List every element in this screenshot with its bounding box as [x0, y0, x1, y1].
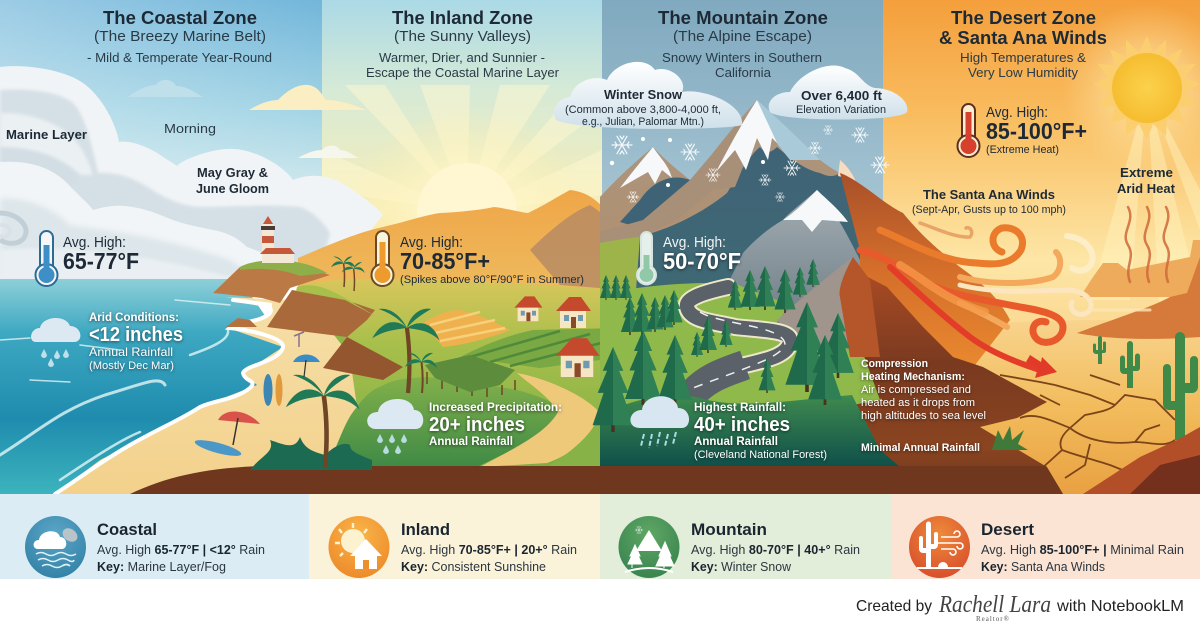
winding road [687, 287, 790, 397]
icon: mountain thermometer [637, 232, 656, 284]
background sky: inland zone with sun rays [322, 0, 602, 318]
small cloud [128, 80, 203, 97]
text: compression heating mechanism: high altitudes to sea level [861, 410, 986, 422]
heading: inland: (The Sunny Valleys) [394, 28, 531, 45]
summary panel: mountain [600, 494, 891, 579]
mountain green slope [600, 237, 640, 300]
icon: cactus and wind [909, 516, 970, 578]
desert shrub [992, 426, 1028, 450]
stat: inland temperature: 70-85°F+ [400, 248, 490, 274]
stat: mountain rainfall: 40+ inches [694, 414, 790, 436]
stat: coastal rainfall [89, 310, 183, 372]
desert rust ridge [1077, 257, 1200, 339]
heading: mountain: The Mountain Zone [658, 8, 828, 28]
footer credit: Realtor® [976, 615, 1010, 623]
desert mesa [1080, 240, 1200, 297]
red wind arrow [1026, 355, 1057, 378]
summary panel: desert: Avg. High 85-100°F+ | Minimal Rain [981, 542, 1184, 557]
stat: mountain rainfall: (Cleveland National Forest) [694, 449, 827, 461]
stat: coastal rainfall: Arid Conditions: [89, 310, 179, 324]
summary panel: coastal: Coastal [97, 520, 157, 539]
footer credit [856, 592, 1184, 623]
cloud: Winter Snow callout: Winter Snow [604, 87, 683, 102]
orange mountain slope [840, 173, 1010, 365]
forest foothill [600, 395, 900, 467]
label: The Santa Ana Winds [912, 187, 1066, 216]
label: The Santa Ana Winds: (Sept-Apr, Gusts up to 100 mph) [912, 204, 1066, 216]
cloud: elevation callout [769, 65, 907, 120]
footer credit: Rachell Lara [938, 592, 1051, 618]
summary panel: mountain: Avg. High 80-70°F | 40+° Rain [691, 542, 860, 557]
desert rock shade [1130, 455, 1200, 494]
stat: mountain rainfall [694, 400, 827, 461]
heading: coastal: (The Breezy Marine Belt) [94, 28, 266, 45]
cloud: Winter Snow callout: (Common above 3,800-4,000 ft, [565, 104, 721, 116]
label: Extreme Arid Heat: Extreme [1120, 165, 1173, 180]
stat: inland temperature [400, 234, 584, 286]
stat: coastal temperature [63, 234, 139, 274]
stat: desert temperature [986, 104, 1087, 156]
label: Extreme Arid Heat [1117, 165, 1176, 196]
heading: coastal: - Mild & Temperate Year-Round [87, 50, 272, 65]
label: May Gray and June Gloom: May Gray & [197, 165, 268, 180]
waves [0, 300, 230, 480]
summary panel: inland [309, 494, 600, 579]
houses [514, 296, 600, 377]
cloud: Winter Snow callout [554, 62, 742, 129]
small white cloud [298, 145, 358, 158]
stat: mountain temperature: 50-70°F [663, 248, 741, 274]
label: Extreme Arid Heat: Arid Heat [1117, 181, 1176, 196]
icon: coastal rain cloud [31, 318, 80, 367]
heading: inland: The Inland Zone [392, 8, 533, 28]
heading: mountain: (The Alpine Escape) [673, 28, 812, 45]
headland cliffs [213, 260, 403, 380]
heading: desert: The Desert Zone [951, 8, 1096, 28]
heat waves [1126, 207, 1169, 282]
heading: mountain: California [715, 65, 772, 80]
valley fields [297, 279, 660, 467]
beach [55, 297, 367, 494]
summary panel: desert [891, 494, 1200, 579]
stat: coastal temperature: 65-77°F [63, 248, 139, 274]
inland back hills [298, 190, 640, 320]
stat: inland temperature: Avg. High: [400, 234, 463, 251]
desert foreground rocks [1083, 427, 1200, 494]
inner brown ridge [840, 257, 1063, 494]
desert ground [890, 319, 1200, 494]
summary panel: coastal [0, 494, 309, 579]
icon: coastal thermometer [36, 231, 58, 286]
marine layer clouds [0, 66, 383, 280]
heading: desert: Very Low Humidity [968, 65, 1079, 80]
stat: desert temperature: (Extreme Heat) [986, 144, 1059, 156]
heading: coastal: The Coastal Zone [103, 8, 257, 28]
stat: coastal temperature: Avg. High: [63, 234, 126, 251]
mountain range [600, 100, 930, 400]
summary panel: desert: Key: Santa Ana Winds [981, 559, 1105, 574]
summary panel: inland: Avg. High 70-85°F+ | 20+° Rain [401, 542, 577, 557]
icon: mountain rain cloud [630, 396, 689, 448]
small cream cloud [249, 85, 367, 110]
conifer trees [593, 259, 854, 432]
grey rock foot [777, 257, 853, 350]
footer credit: with NotebookLM [1056, 598, 1184, 615]
summary panel: inland: Key: Consistent Sunshine [401, 559, 546, 574]
stat: desert temperature: Avg. High: [986, 104, 1048, 121]
stat: desert temperature: 85-100°F+ [986, 118, 1087, 144]
background sky: coastal zone [0, 0, 322, 280]
shoreline foam [55, 300, 283, 494]
heading: coastal [87, 8, 272, 65]
cloud: elevation callout: Elevation Variation [796, 104, 886, 116]
background sky: desert zone [883, 0, 1200, 420]
cloud: Winter Snow callout: e.g., Julian, Palomar Mtn.) [582, 116, 704, 128]
footer credit: Created by [856, 598, 932, 615]
label: Minimal Annual Rainfall: Minimal Annual Rainfall [861, 442, 980, 454]
stat: inland temperature: (Spikes above 80°F/90°F in Summer) [400, 274, 584, 286]
heading: desert [939, 8, 1107, 80]
text: compression heating mechanism: heated as it drops from [861, 397, 975, 409]
soil base band [130, 466, 1063, 494]
label: May Gray and June Gloom: June Gloom [196, 181, 269, 196]
summary panel: coastal: Key: Marine Layer/Fog [97, 559, 226, 574]
text: compression heating mechanism: Compression [861, 358, 928, 370]
small palms on the hill [331, 256, 365, 291]
text: compression heating mechanism: Air is compressed and [861, 384, 971, 396]
background sky: mountain zone [602, 0, 883, 300]
wind swirls: The Santa Ana Winds [860, 223, 1150, 370]
valley green behind road [600, 283, 880, 410]
stat: coastal rainfall: <12 inches [89, 324, 183, 346]
stat: coastal rainfall: (Mostly Dec Mar) [89, 360, 174, 372]
cracked earth [1000, 375, 1175, 478]
stat: inland rainfall: Annual Rainfall [429, 434, 513, 448]
icon: inland rain cloud [367, 399, 423, 454]
icon: cloud over waves [25, 516, 86, 578]
palm tree inland [372, 309, 440, 393]
heading: mountain [658, 8, 828, 80]
summary panel: coastal: Avg. High 65-77°F | <12° Rain [97, 542, 265, 557]
orange peak beside grey rock [840, 257, 880, 357]
shoreline rock [226, 318, 257, 327]
icon: trees and peaks [618, 516, 680, 578]
stat: mountain rainfall: Annual Rainfall [694, 434, 778, 448]
stat: mountain temperature [663, 234, 741, 274]
icon: inland thermometer [372, 231, 394, 286]
summary panel: mountain: Key: Winter Snow [691, 559, 792, 574]
summary panel: desert: Desert [981, 520, 1034, 539]
sea [0, 279, 285, 494]
stat: inland rainfall: Increased Precipitation: [429, 400, 562, 414]
heading: desert: & Santa Ana Winds [939, 28, 1107, 48]
icon: sun over house [328, 516, 390, 578]
snowflakes [610, 126, 889, 202]
cacti [1093, 332, 1198, 440]
label: The Santa Ana Winds: The Santa Ana Winds [923, 187, 1055, 202]
sun: desert [1062, 3, 1200, 320]
label: Morning: Morning [164, 121, 216, 136]
label: Marine Layer: Marine Layer [6, 127, 87, 142]
beach umbrellas and boards [194, 332, 320, 459]
cloud: elevation callout: Over 6,400 ft [801, 88, 883, 103]
summary panel: mountain: Mountain [691, 520, 767, 539]
heading: inland: Warmer, Drier, and Sunnier - [379, 50, 545, 65]
stat: mountain temperature: Avg. High: [663, 234, 726, 251]
text: compression heating mechanism: Heating Mechanism: [861, 371, 965, 383]
coastal shrubs [250, 437, 372, 470]
heading: inland: Escape the Coastal Marine Layer [366, 65, 560, 80]
icon: desert thermometer [958, 104, 980, 157]
stat: coastal rainfall: Annual Rainfall [89, 345, 173, 359]
heading: inland [366, 8, 560, 80]
stat: inland rainfall [429, 400, 562, 448]
summary panel: inland: Inland [401, 520, 450, 539]
land base fill [300, 290, 620, 470]
stat: mountain rainfall: Highest Rainfall: [694, 400, 786, 414]
heading: desert: High Temperatures & [960, 50, 1086, 65]
stat: inland rainfall: 20+ inches [429, 414, 525, 436]
label: May Gray and June Gloom [196, 165, 269, 196]
heading: mountain: Snowy Winters in Southern [662, 50, 822, 65]
lighthouse [260, 216, 295, 263]
beach palm [286, 375, 360, 467]
text: compression heating mechanism [861, 358, 986, 422]
